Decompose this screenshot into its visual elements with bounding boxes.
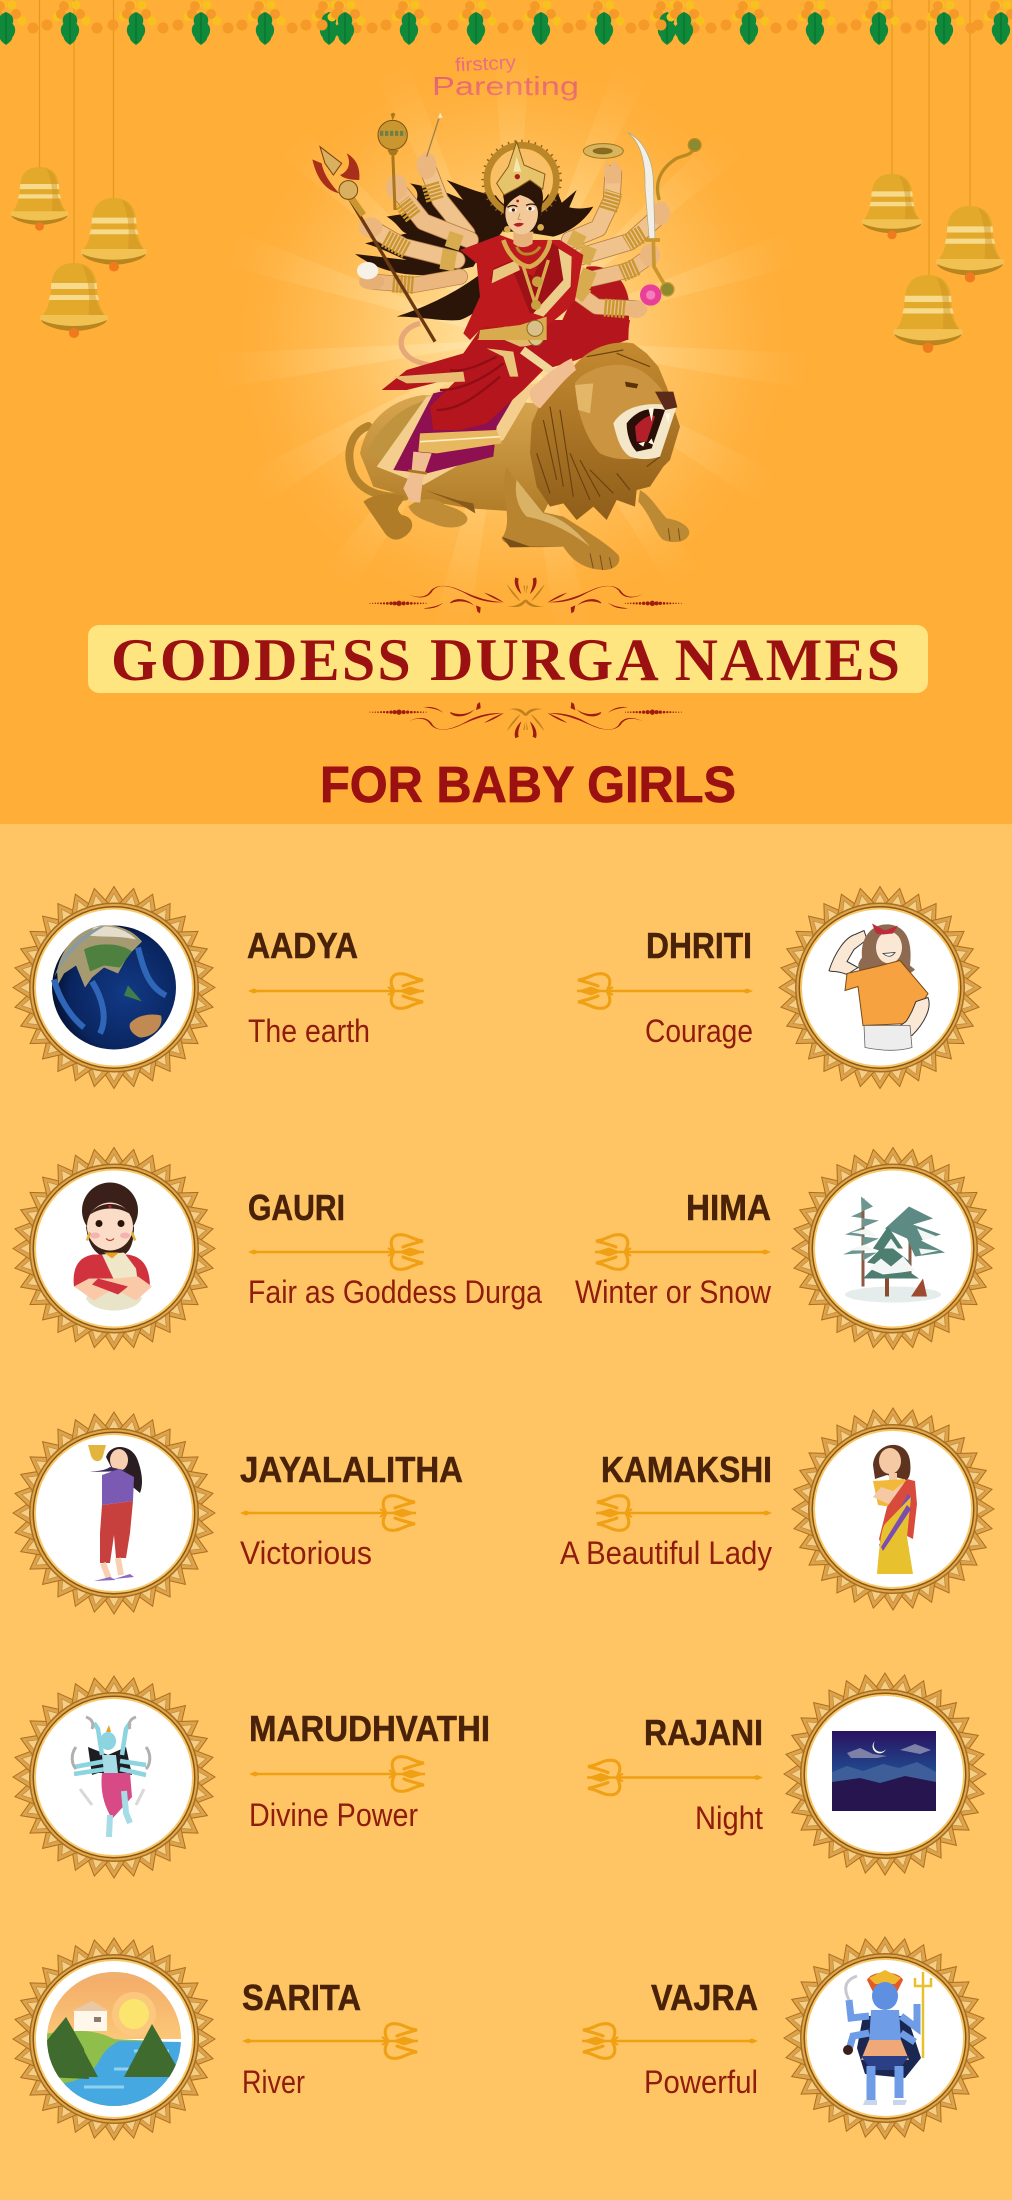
panel: Marudhvathi [0,1657,490,1897]
meaning: The earth [248,1013,370,1049]
icon: night sky [765,1654,1005,1894]
meaning: Victorious [240,1535,372,1571]
name: AADYA [247,925,358,966]
name: MARUDHVATHI [249,1708,490,1749]
divider trident [248,1235,424,1269]
icon: woman in yellow saree [773,1389,1012,1629]
icon: river landscape [12,1937,216,2141]
name: RAJANI [644,1712,763,1753]
ornament below title [369,702,682,738]
icon: goddess Kali [765,1918,1005,2158]
icon: woman in saree [0,1128,234,1369]
meaning: River [242,2064,305,2100]
name: KAMAKSHI [601,1449,772,1490]
name: GAURI [248,1187,345,1228]
panel: Aadya [0,867,424,1108]
meaning: Fair as Goddess Durga [248,1274,542,1310]
logo [432,52,579,101]
icon: woman with trophy [0,1393,234,1633]
subtitle: FOR BABY GIRLS [320,756,736,813]
sunburst behind goddess [212,40,812,637]
divider trident [595,1235,771,1269]
panel: Hima [575,1128,1012,1369]
header background [0,0,1012,824]
panel: Rajani [587,1654,1005,1894]
divider trident [587,1760,763,1795]
goddess back: hair, cloth and arms [355,152,670,340]
name: VAJRA [651,1977,758,2018]
meaning: Night [695,1800,763,1836]
meaning: Divine Power [249,1797,418,1833]
icon: snowy trees [773,1128,1012,1369]
divider trident [248,974,424,1008]
name: JAYALALITHA [240,1449,463,1490]
logo: Parenting [432,71,579,101]
goddess Durga on lion illustration [312,113,701,570]
panel: Vajra [582,1918,1005,2158]
name: HIMA [686,1187,771,1228]
garland [0,0,1012,45]
names section background [0,824,1012,2200]
goddess weapons [312,113,701,342]
divider trident [242,2024,418,2058]
panel: Sarita [12,1937,418,2141]
meaning: Winter or Snow [575,1274,772,1310]
icon: strong woman [760,867,1000,1108]
lion mane and head [530,343,680,520]
goddess torso and head [460,142,583,340]
temple bells and strings left [10,0,147,338]
temple bells and strings right [862,0,1004,353]
divider trident [596,1496,772,1530]
meaning: A Beautiful Lady [560,1535,772,1571]
panel: Dhriti [577,867,1000,1108]
divider trident [582,2024,758,2058]
panel: Kamakshi [560,1389,1012,1629]
panel: Jayalalitha [0,1393,463,1633]
icon: many armed deity [0,1657,234,1897]
name: SARITA [242,1977,361,2018]
ornament above title [369,577,682,613]
divider trident [240,1496,416,1530]
lion body and legs [349,395,689,570]
divider trident [249,1757,425,1791]
name: DHRITI [646,925,752,966]
icon: earth [0,867,234,1108]
meaning: Courage [645,1013,753,1049]
goddess legs and feet [403,358,576,503]
panel: Gauri [0,1128,542,1369]
goddess lower garment [377,311,630,485]
meaning: Powerful [644,2064,758,2100]
divider trident [577,974,753,1008]
title banner: GODDESS DURGA NAMES [111,627,900,693]
logo: firstcry [455,52,517,77]
